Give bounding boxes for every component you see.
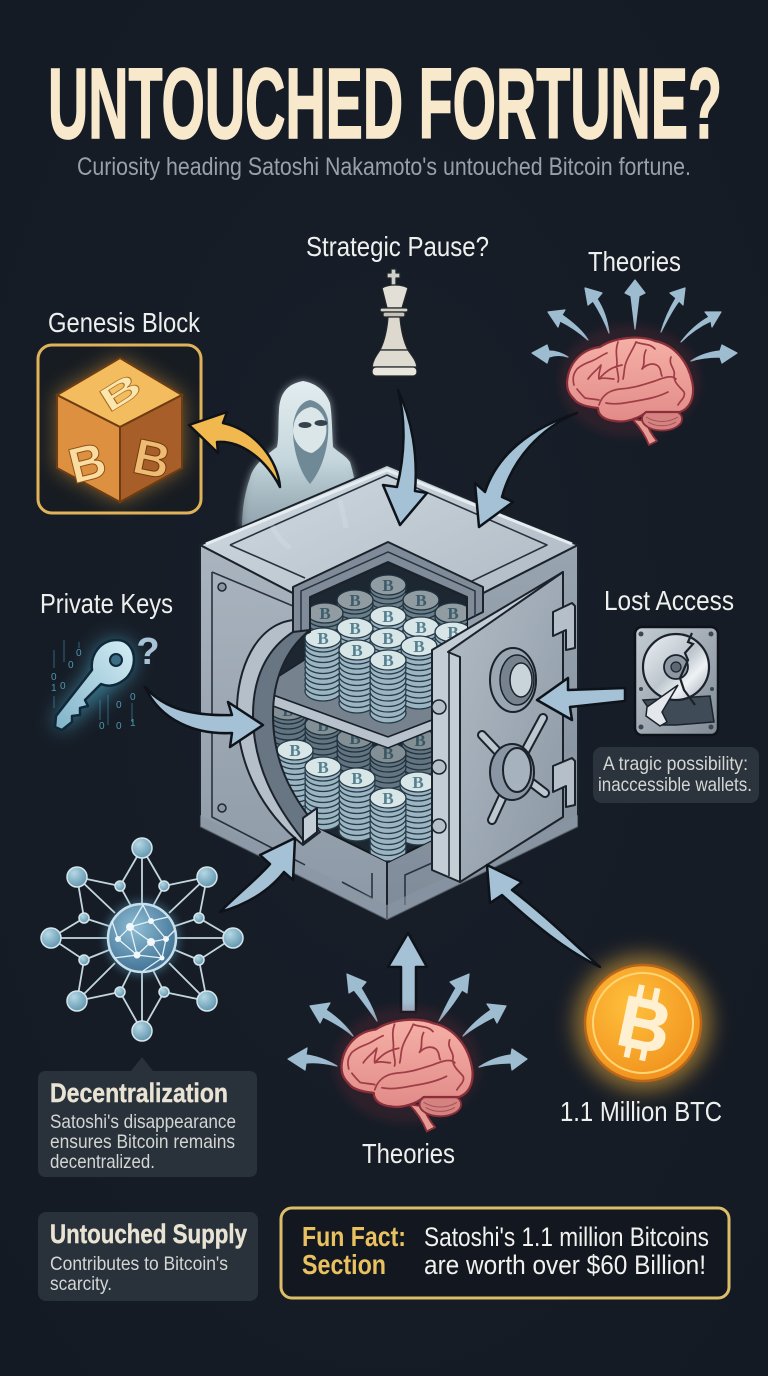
vault interior [273, 562, 467, 862]
panel: untouched supply: scarcity. [50, 1273, 112, 1295]
arrow: key to safe [145, 687, 263, 747]
lower shelf back coins: B [382, 744, 394, 763]
lower shelf front coins: B [412, 773, 424, 792]
top theory arrows [532, 280, 737, 363]
binary digits: 0 [99, 721, 105, 732]
label: Lost Access: Lost Access [604, 585, 734, 616]
combination dial [490, 648, 536, 712]
coin stacks [270, 575, 471, 861]
fun fact text: are worth over $60 Billion! [424, 1250, 706, 1280]
icon: network globe [41, 838, 243, 1041]
label: 1.1 Million BTC: 1.1 Million BTC [560, 1096, 722, 1127]
label: Genesis Block: Genesis Block [48, 307, 201, 338]
cube glow [57, 358, 182, 502]
fun fact heading: Fun Fact: [302, 1221, 406, 1252]
upper shelf middle coins [336, 605, 467, 652]
binary streaks [54, 640, 132, 725]
binary digits: 0 [68, 660, 74, 671]
upper shelf middle coins: B [349, 619, 361, 638]
upper shelf front coins: B [382, 651, 394, 670]
fun fact heading: Section [302, 1249, 386, 1280]
upper shelf front coins: B [413, 637, 425, 656]
panel: genesis block [38, 345, 201, 513]
lower shelf front coins: B [382, 789, 394, 808]
shelf [275, 660, 431, 736]
callout: tragic possibility [593, 747, 759, 803]
upper shelf back coins: B [447, 604, 459, 623]
panel: decentralization: ensures Bitcoin remains [50, 1131, 235, 1153]
arrow: network to safe [220, 838, 295, 912]
lower shelf back coins [274, 707, 431, 790]
fun fact heading [302, 1221, 406, 1280]
upper shelf back coins: B [349, 591, 361, 610]
fun fact text [424, 1222, 709, 1280]
hood cavity [293, 400, 328, 484]
binary digits [51, 648, 136, 732]
icon: bitcoin coin: B [611, 981, 678, 1070]
lower shelf back coins: B [317, 716, 329, 735]
icon: bitcoin cube: B [93, 366, 148, 420]
lower shelf front coins: B [351, 769, 363, 788]
cavity frame [293, 542, 483, 640]
upper shelf back coins [311, 574, 467, 630]
open door [432, 572, 563, 882]
panel: decentralization: Satoshi's disappearance [50, 1111, 236, 1133]
bottom theory arrow up [388, 933, 427, 1012]
upper shelf front coins [305, 628, 437, 723]
panel: untouched supply: Untouched Supply [50, 1219, 247, 1249]
lower shelf front coins: B [317, 758, 329, 777]
binary digits: 0 [116, 700, 122, 711]
upper shelf middle coins: B [415, 618, 427, 637]
upper shelf middle coins: B [382, 607, 394, 626]
upper shelf back coins: B [319, 604, 331, 623]
safe vault [200, 465, 578, 920]
label: Strategic Pause?: Strategic Pause? [306, 231, 489, 262]
round door frame arc [237, 620, 320, 845]
icon: private key [51, 631, 160, 732]
arrow: drive to safe [537, 678, 625, 720]
icon: bitcoin coin [575, 955, 711, 1091]
arrow: coin to safe [487, 865, 600, 967]
mask [293, 407, 326, 453]
upper shelf middle coins: B [447, 623, 459, 642]
upper shelf front coins: B [351, 641, 363, 660]
binary digits: 0 [76, 648, 82, 659]
safe body faces [200, 465, 578, 920]
upper shelf middle coins: B [382, 629, 394, 648]
binary digits: 0 [116, 721, 122, 732]
panel: decentralization: decentralized. [50, 1151, 155, 1173]
arrow: chess to safe [383, 390, 427, 525]
lower shelf front coins [277, 740, 436, 861]
panel: untouched supply: Contributes to Bitcoin's [50, 1253, 228, 1275]
icon: hard drive [635, 627, 718, 735]
arrow: theories to safe [475, 413, 577, 527]
bolts [218, 583, 226, 812]
lower shelf back coins: B [414, 731, 426, 750]
icon: chess king [372, 269, 417, 376]
icon: brain bottom [334, 1007, 480, 1131]
right hinges [553, 603, 575, 807]
handle wheel [482, 718, 545, 820]
fun fact text: Satoshi's 1.1 million Bitcoins [424, 1222, 709, 1252]
question mark: ? [136, 631, 160, 673]
icon: bitcoin cube: B [128, 428, 175, 490]
binary digits: 0 [130, 692, 136, 703]
ghost figure: Satoshi [242, 381, 360, 528]
lower shelf back coins: B [349, 729, 361, 748]
binary digits: 1 [51, 683, 57, 694]
label: Theories top: Theories [588, 246, 681, 277]
label: Private Keys: Private Keys [40, 588, 173, 619]
arrow: ghost to genesis block [189, 412, 280, 487]
panel: decentralization: Decentralization [50, 1078, 228, 1108]
ghost translucent streaks over safe [272, 500, 346, 548]
panel: decentralization [38, 1057, 257, 1177]
binary digits: 1 [130, 718, 136, 729]
upper shelf front coins: B [317, 629, 329, 648]
upper shelf back coins: B [382, 576, 394, 595]
upper shelf back coins: B [415, 591, 427, 610]
icon: brain top [560, 325, 700, 445]
lower shelf back coins: B [282, 701, 294, 720]
door rivets [432, 700, 446, 833]
binary digits: 0 [60, 681, 66, 692]
icon: bitcoin cube: B [63, 431, 112, 495]
binary digits: 0 [51, 672, 57, 683]
bottom theory arrows [288, 974, 527, 1070]
lower shelf front coins: B [289, 741, 301, 760]
callout: tragic possibility: A tragic possibility: [603, 753, 748, 775]
panel: untouched supply [38, 1212, 258, 1301]
label: Theories bottom: Theories [362, 1138, 455, 1169]
door lip [303, 808, 317, 843]
panel: fun fact [281, 1208, 729, 1298]
icon: bitcoin cube [57, 358, 182, 502]
round door inner edge [253, 630, 318, 840]
